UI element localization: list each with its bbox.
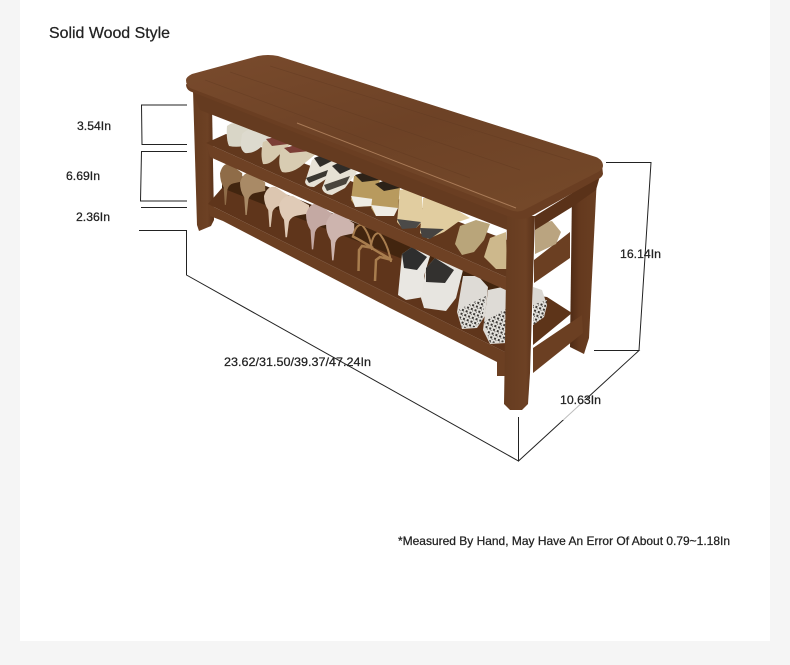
white sneakers <box>305 155 337 187</box>
bench seat top <box>186 55 603 212</box>
heel 1 <box>220 164 242 205</box>
sneaker pair beige <box>227 123 255 147</box>
title: Solid Wood Style <box>49 25 170 42</box>
length dimension <box>139 230 518 461</box>
slip-on back <box>533 287 547 325</box>
heel 5 <box>306 204 333 249</box>
upper shoes <box>227 123 561 269</box>
heels <box>220 164 392 281</box>
sneaker 2 <box>421 258 463 311</box>
lower right apron <box>533 315 583 373</box>
right side apron <box>535 176 600 230</box>
footnote: *Measured By Hand, May Have An Error Of About 0.79~1.18In <box>398 534 730 548</box>
back right leg <box>570 176 597 354</box>
lower shelf front edge <box>208 204 507 376</box>
3.54 bracket <box>142 105 187 144</box>
dimension label: depth: 10.63In <box>560 393 601 407</box>
lower shelf top <box>208 188 507 353</box>
canvas shoe 1 <box>262 137 290 164</box>
dark backdrop between shelves <box>222 168 507 353</box>
dimension label: 3.54: 3.54In <box>77 119 111 133</box>
upper shelf right end <box>534 232 570 283</box>
cream boots <box>397 188 422 228</box>
upper shelf front edge <box>206 143 508 291</box>
depth dimension <box>518 350 639 461</box>
fade around 10.63 label <box>558 400 602 420</box>
seat wood grain <box>205 66 570 178</box>
height dimension <box>606 162 651 350</box>
dimension label: height: 16.14In <box>620 247 661 261</box>
dimension label: length: 23.62/31.50/39.37/47.24In <box>224 355 371 369</box>
highlight on seat edge <box>297 123 516 208</box>
heel 2 <box>240 173 265 215</box>
lower shelf right surface <box>533 295 572 345</box>
sandal 8 <box>370 233 392 281</box>
dimension label: 6.69: 6.69In <box>66 169 100 183</box>
tan sneakers <box>351 172 380 207</box>
bench seat edge <box>186 84 603 219</box>
bench top front rail <box>192 90 510 231</box>
canvas shoe 2 <box>279 145 317 172</box>
heel 3 <box>264 187 289 227</box>
slip-on 1 <box>457 276 488 329</box>
2.36 bracket <box>141 206 187 208</box>
slip-on 2 <box>483 286 507 344</box>
sandal 7 <box>352 225 373 271</box>
loafers <box>455 220 490 255</box>
dimension label: 2.36: 2.36In <box>76 210 110 224</box>
upper shelf top <box>206 134 508 278</box>
front right leg <box>504 216 535 410</box>
heel 6 <box>326 213 354 260</box>
loafer back <box>535 221 561 254</box>
6.69 bracket <box>140 152 187 201</box>
upper shelf <box>206 134 570 291</box>
dimension lines <box>139 105 651 461</box>
lower shelf <box>208 188 572 376</box>
sneaker 1 <box>398 247 430 300</box>
heel 4 <box>279 196 309 237</box>
back left leg <box>193 90 214 231</box>
lower sneakers <box>398 247 547 344</box>
bench illustration <box>186 55 603 410</box>
